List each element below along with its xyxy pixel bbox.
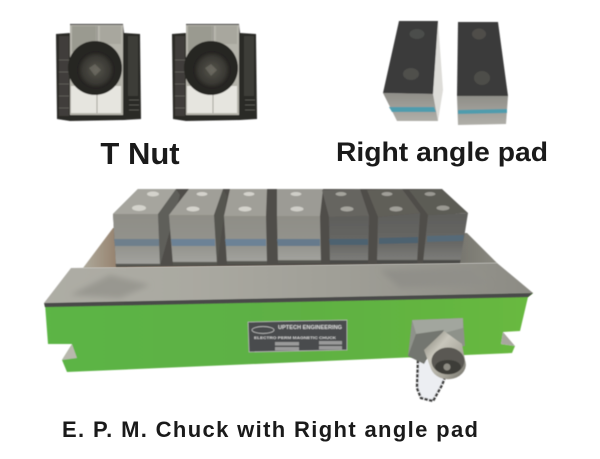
T nut photo, left: [56, 24, 141, 121]
chuck top plate: [44, 263, 533, 307]
pad 3: [224, 189, 267, 264]
right angle pads on chuck: [113, 189, 468, 267]
chuck rear bed: [83, 228, 497, 268]
E.P.M. chuck with right angle pads: [44, 189, 533, 401]
pad 7: [409, 189, 468, 263]
T Nut caption: T Nut: [100, 136, 180, 171]
right angle pad, right: [457, 22, 508, 125]
E.P.M. chuck caption: E. P. M. Chuck with Right angle pad: [62, 417, 478, 442]
chuck front green body: [45, 293, 533, 372]
nameplate: ELECTRO PERM MAGNETIC CHUCK: [254, 336, 336, 340]
connector with cap and chain: [408, 318, 466, 401]
right angle pad, left: [383, 21, 443, 121]
pad 6: [367, 189, 420, 263]
nameplate: [248, 320, 347, 352]
Right angle pad caption: Right angle pad: [336, 137, 548, 167]
pad 5: [322, 189, 369, 263]
nameplate: UPTECH ENGINEERING: [278, 325, 342, 331]
pad 2: [169, 189, 227, 265]
pad 1: [113, 189, 180, 267]
T nut photo, right: [172, 24, 257, 121]
pad 4: [277, 189, 323, 263]
